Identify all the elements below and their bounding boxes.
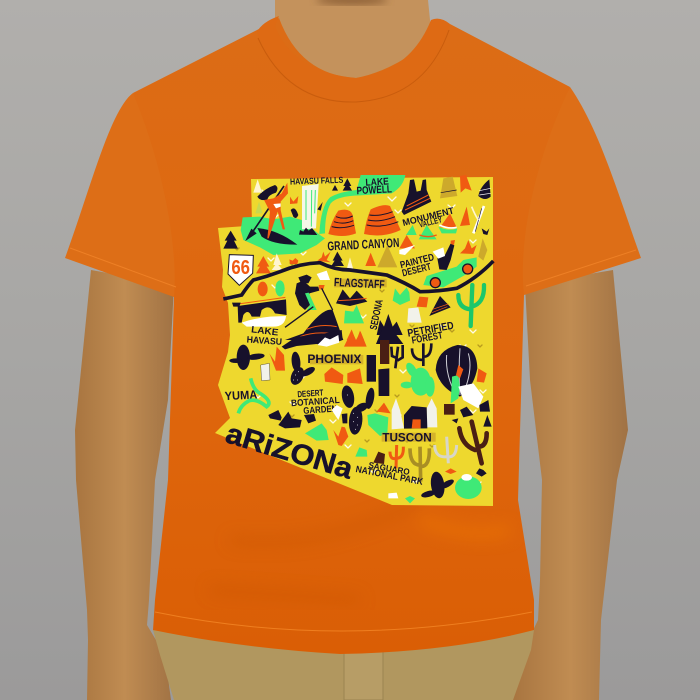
green snake [238,378,269,413]
left arm [75,270,174,700]
flagstaff label: FLAGSTAFF [334,275,385,292]
sandstone rock pair [347,329,364,340]
grey cactus [412,343,431,366]
brown saguaro [459,422,487,463]
label: botanical: BOTANICAL [291,395,340,408]
hot air balloon [436,345,477,415]
hair [257,185,277,200]
label: painted: PAINTED [399,252,435,271]
orange rocks top [344,331,367,347]
label: desert: DESERT [297,387,324,399]
t-shirt [65,16,641,654]
south map illustrations [222,324,492,503]
saguaro cactus [458,285,484,326]
prickly pear tall [340,384,376,435]
aqueduct bridge [232,297,287,327]
snow patch [317,335,339,347]
label: petrified: PETRIFIED [407,320,455,340]
right sleeve [523,87,641,295]
olive saguaro [410,447,429,482]
sedona rocks [377,314,403,335]
mid trees row [256,238,487,273]
label: havasu falls: HAVASU FALLS [290,175,344,187]
label: yuma: YUMA [224,387,258,403]
prickly pear left [229,345,265,370]
state outline [215,177,493,506]
printed Arizona map [215,175,493,506]
north-east rocks [438,175,491,235]
label: monument: MONUMENT [401,205,455,228]
waterfall [299,184,319,235]
white rock [261,363,270,381]
collar [257,16,450,102]
canyon rock left [328,210,356,236]
white agave [332,405,343,420]
right arm [513,270,628,700]
label: lake: LAKE [365,177,389,189]
mission church [392,398,437,429]
label: havasu: HAVASU [246,335,283,347]
shirt body [133,18,570,654]
paddle board [257,228,297,245]
swimsuit [273,203,281,208]
beaver-tail prickly pear [420,471,455,499]
label: tucson: TUSCON [382,430,432,444]
trousers [153,630,534,700]
hiker [285,271,333,327]
trouser fly [344,652,383,700]
label: valley: VALLEY [418,215,444,230]
lake powell water [319,175,405,234]
flagstaff rocks [336,289,367,306]
left sleeve [65,93,175,297]
label: saguaro: SAGUARO [368,460,411,477]
grey cactus lower [435,437,457,463]
paddle lake [241,217,325,255]
dark rock low [373,452,385,464]
paddler body [264,183,288,238]
orange cactus low [390,445,403,468]
small agaves [388,468,487,503]
monument valley butte [402,179,431,215]
north map illustrations [223,175,493,347]
neck [275,0,431,82]
hem stitching [155,612,532,631]
paddle [247,186,284,239]
label: grand canyon: GRAND CANYON [327,236,400,254]
orange butte pair [324,367,363,384]
fabric folds [210,500,510,600]
sedona label: SEDONA [369,298,386,331]
prickly pear centre [288,351,316,387]
green prickly cactus [401,361,435,397]
route 66 shield: 66 [231,256,250,279]
label: arizona: aRiZONa [222,418,357,486]
label: desert: DESERT [401,262,432,279]
cactus dark [391,345,403,368]
orange star plant [377,403,391,413]
tall brown block [380,340,389,364]
pottery vases [258,280,285,296]
jeep [423,240,477,288]
label: national park: NATIONAL PARK [355,464,424,487]
label: garden: GARDEN [303,403,338,416]
chin shadow [316,0,388,5]
round green cactus [455,474,482,499]
label: forest: FOREST [411,330,444,347]
small scattered marks [235,190,486,485]
route 66 shield [228,255,253,285]
label: powell: POWELL [356,183,393,197]
mountain base snow [282,330,343,349]
agave and green plants [344,287,451,323]
buildings [367,355,389,396]
painted desert hills [399,225,437,255]
green cactus small [367,413,388,436]
stand-up paddler [247,183,297,245]
black agaves [268,410,347,428]
orange cactus top left [269,347,285,371]
green striped cactus [305,423,329,441]
route road [223,261,493,299]
north-west trees and plants [223,178,352,249]
green tuft [355,447,367,457]
balloon passengers [451,365,487,408]
label: lake: LAKE [251,324,279,338]
hiker mountain [285,310,343,340]
dark rocks cluster [452,400,492,427]
jeep driver [437,243,454,270]
canyon rock right [364,205,401,235]
label: phoenix: PHOENIX [307,352,361,366]
orange cactus mid [333,427,348,446]
sedona rocks lower [376,330,403,344]
